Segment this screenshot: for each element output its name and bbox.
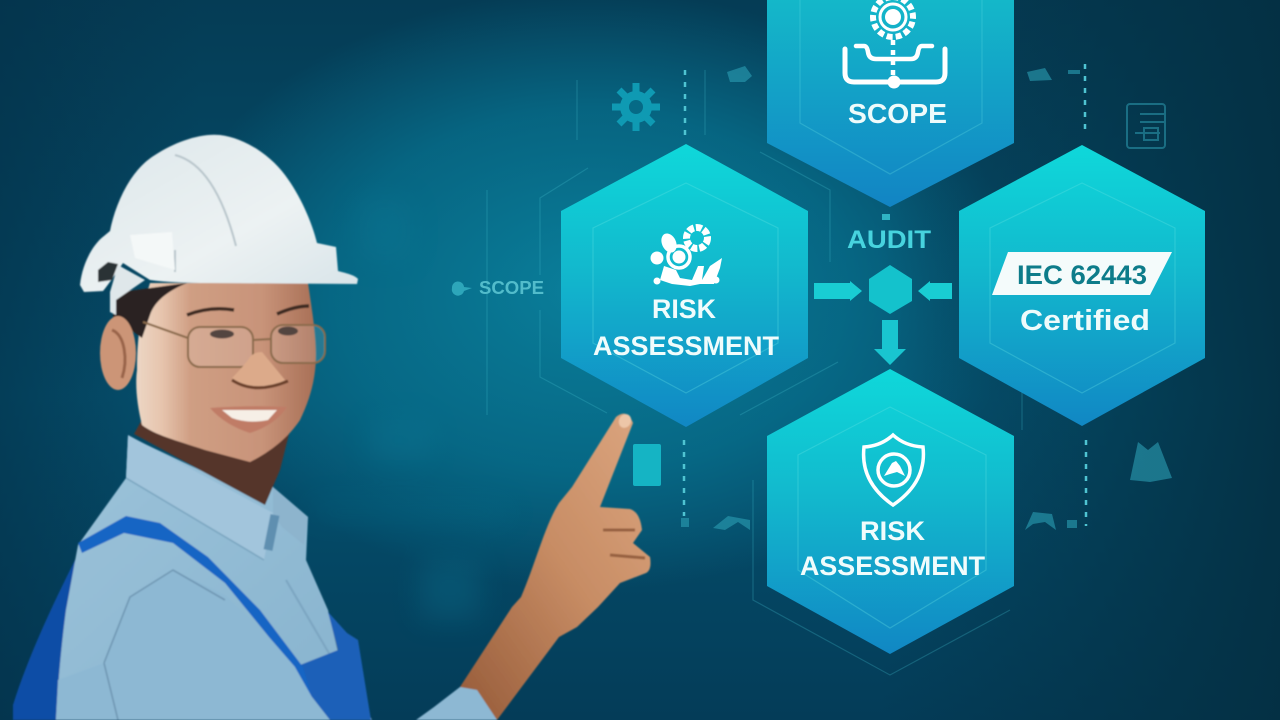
arrow: left xyxy=(918,281,952,301)
nose xyxy=(232,352,285,389)
hexagon: scope xyxy=(767,0,1014,207)
eyes xyxy=(210,326,298,338)
icon: gear and flow xyxy=(845,0,945,88)
standard label: IEC 62443 xyxy=(1017,260,1147,290)
scope text: SCOPE xyxy=(479,278,544,298)
background circuit lines xyxy=(487,70,1022,675)
lower inner outline xyxy=(798,407,986,628)
knuckle lines xyxy=(603,530,645,558)
shirt collar xyxy=(126,435,273,560)
upper risk label: RISK xyxy=(652,294,716,324)
glasses xyxy=(143,322,325,367)
scope marker xyxy=(452,281,472,296)
arrow: down xyxy=(874,320,906,365)
shirt xyxy=(56,435,372,720)
audit center hexagon xyxy=(869,265,912,314)
teeth xyxy=(222,410,277,422)
scope inner outline xyxy=(800,0,982,174)
placket xyxy=(268,515,275,550)
shirt right collar xyxy=(273,487,308,545)
eyebrows xyxy=(187,306,309,315)
scope label: SCOPE xyxy=(848,98,947,129)
apron back xyxy=(13,550,80,720)
audit label: AUDIT xyxy=(847,226,931,254)
dashed connector lines xyxy=(684,64,1086,526)
sleeve seam xyxy=(104,570,225,720)
icon: shield xyxy=(864,435,923,505)
fingernail xyxy=(617,412,633,430)
hair xyxy=(113,283,187,338)
certified hexagon shape xyxy=(959,145,1205,426)
faint small icons xyxy=(681,66,1172,530)
person xyxy=(13,135,650,720)
upper assessment label: ASSESSMENT xyxy=(593,331,779,361)
lower risk label: RISK xyxy=(860,516,925,546)
audit small icon xyxy=(882,214,890,220)
icon: gears and hazards xyxy=(650,228,722,286)
hexagon: certified xyxy=(959,145,1205,426)
lower assessment label: ASSESSMENT xyxy=(800,551,985,581)
hexagon: risk assessment lower xyxy=(767,369,1014,654)
lower hexagon shape xyxy=(767,369,1014,654)
helmet xyxy=(80,135,358,315)
face xyxy=(136,283,316,462)
audit group xyxy=(814,214,952,365)
helmet side clip xyxy=(110,265,145,315)
hexagon: risk assessment upper xyxy=(561,144,808,427)
faint gear icon xyxy=(612,83,660,131)
ear inner xyxy=(112,330,125,378)
arm and hand xyxy=(436,414,650,720)
scope hexagon shape xyxy=(767,0,1014,207)
upper hexagon shape xyxy=(561,144,808,427)
ear xyxy=(100,316,136,390)
helmet ridge xyxy=(175,155,236,272)
arrow: right xyxy=(814,281,862,301)
sleeve front xyxy=(56,570,335,720)
mouth xyxy=(210,406,287,433)
faint document icon xyxy=(1127,104,1165,148)
certified label: Certified xyxy=(1020,305,1150,337)
certification banner xyxy=(992,252,1172,295)
cyan tablet icon xyxy=(633,444,661,486)
neck shadow xyxy=(134,405,290,505)
shirt cuff xyxy=(416,687,497,720)
apron bib xyxy=(295,612,371,720)
faint scope label xyxy=(452,278,544,298)
upper inner outline xyxy=(593,183,778,393)
blue strap xyxy=(78,516,312,697)
certified inner outline xyxy=(990,183,1175,393)
